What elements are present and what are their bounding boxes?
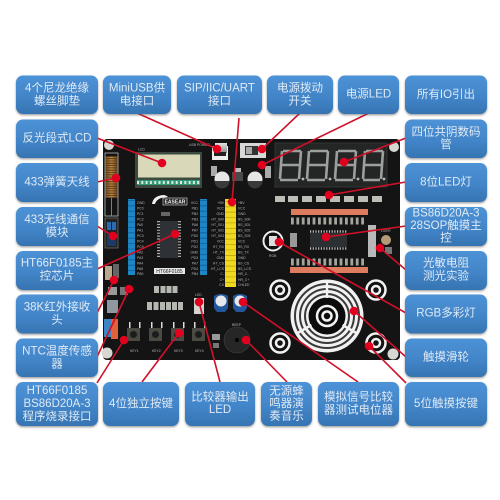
label: potentiometer: 器测试电位器 [324, 402, 393, 416]
circuit board [102, 139, 400, 360]
label: MiniUSB power [103, 76, 171, 114]
callout dots [109, 145, 384, 350]
four key switches [127, 322, 206, 353]
USB socket: USB POWER [189, 143, 210, 147]
pin labels: PB3 [192, 218, 198, 222]
label: nylon screw feet: 螺丝脚垫 [34, 94, 80, 108]
label: buzzer: 鸣器演 [269, 396, 304, 410]
vertical connector and photoresistor [368, 225, 392, 257]
label: photoresistor [405, 251, 487, 290]
pin labels: BS_TX [238, 250, 249, 254]
touch wheel [290, 280, 364, 352]
label: nylon screw feet [16, 76, 98, 114]
pin labels: VCC [217, 240, 225, 244]
label: programming interface: BS86D20A-3 [23, 398, 91, 410]
pin labels: VCC [191, 201, 199, 205]
pin labels: HT_CS [213, 262, 225, 266]
pin labels: VCC [238, 240, 246, 244]
pin labels: CX [219, 283, 225, 287]
label: power switch [267, 76, 333, 114]
pin labels: CHLED [238, 283, 250, 287]
pin labels: PD3 [191, 256, 198, 260]
blue pin header left [128, 199, 135, 275]
comparator LED [194, 293, 204, 314]
pin labels: PA0 [137, 223, 143, 227]
main MCU chip [158, 212, 180, 258]
pin labels: PA5 [137, 267, 143, 271]
label: touch wheel [405, 338, 487, 377]
label: all IO [405, 76, 487, 114]
pin labels: PD1 [191, 240, 198, 244]
pin labels: PC5 [137, 245, 144, 249]
small resistor rows [147, 286, 183, 310]
pin labels: BS_CS [238, 262, 250, 266]
label: buzzer: 奏音乐 [269, 408, 304, 422]
label: photoresistor: 测光实验 [423, 268, 469, 282]
label: HT66F0185 MCU: HT66F0185主 [21, 256, 93, 270]
label: comparator LED: LED [209, 404, 231, 416]
pin labels: VCC [238, 206, 246, 210]
pin labels: +BV [238, 201, 245, 205]
blue pin header right [200, 199, 207, 275]
pin labels: HT_S00 [212, 218, 224, 222]
label: power switch: 电源拨动 [277, 80, 323, 94]
pin labels: PA3 [137, 256, 143, 260]
label: LCD [16, 120, 98, 158]
touch buttons [270, 280, 386, 352]
pin labels: GND [216, 212, 225, 216]
label: four keys [103, 382, 179, 426]
label: HT66F0185 MCU: 控芯片 [40, 268, 74, 282]
pin labels: PB0 [137, 272, 144, 276]
pin labels: GND [137, 201, 145, 205]
label: buzzer [261, 382, 312, 426]
label: potentiometer [318, 382, 399, 426]
label: touch controller [405, 207, 487, 246]
label: 433 wireless: 433无线通信 [24, 212, 90, 226]
pin labels: PD4 [191, 267, 198, 271]
label: power LED [338, 76, 399, 114]
pin labels: PA1 [137, 228, 143, 232]
pin labels: PB4 [192, 272, 198, 276]
label: RGB LED [405, 294, 487, 334]
label: 433 wireless: 模块 [46, 226, 69, 239]
label: NTC [16, 338, 98, 377]
label: programming interface [16, 382, 98, 426]
label: comparator LED: 比较器输出 [191, 390, 249, 404]
label: 433 wireless [16, 207, 98, 246]
yellow pin header [225, 199, 236, 287]
pin labels: PC3 [137, 234, 144, 238]
pin labels [137, 201, 252, 287]
pin labels: GND [238, 256, 246, 260]
label: comparator LED [185, 382, 255, 426]
pin labels: BS_S02 [238, 228, 251, 232]
label: SIP IIC UART: 接口 [208, 94, 231, 108]
four key switches: KEY2 [152, 349, 161, 353]
label: touch wheel: 触摸滑轮 [423, 350, 469, 364]
label: MiniUSB power: MiniUSB供 [109, 80, 166, 94]
pin labels: C+ [220, 278, 224, 282]
label: photoresistor: 光敏电阻 [423, 256, 469, 270]
label: all IO: 所有IO引出 [417, 87, 475, 101]
pin labels: PA7 [192, 228, 198, 232]
pin labels: BS_S01 [238, 223, 251, 227]
programming connectors [104, 319, 118, 339]
label: eight LEDs [405, 163, 487, 202]
label: potentiometer: 模拟信号比较 [324, 390, 393, 404]
label: MiniUSB power: 电接口 [120, 94, 154, 108]
pin labels: BS_LCS [238, 267, 252, 271]
pin labels: PC0 [137, 206, 144, 210]
potentiometers [214, 294, 247, 312]
label: power LED: 电源LED [346, 86, 391, 100]
pin labels: VCC [217, 206, 225, 210]
capacitors and regulator [211, 166, 271, 189]
pin labels: PD0 [191, 234, 198, 238]
pin labels: HT_RX [213, 245, 225, 249]
pin labels: PC2 [137, 218, 144, 222]
pin labels: HT_TX [213, 250, 225, 254]
label: 38K infrared: 38K红外接收 [24, 300, 91, 314]
four key switches: KEY3 [174, 349, 183, 353]
label: seven segment [405, 120, 487, 158]
label: four keys: 4位独立按键 [109, 396, 173, 410]
label: 38K infrared: 头 [51, 314, 63, 326]
pin labels: BS_RX [238, 245, 250, 249]
label: touch controller: 28SOP触摸主 [410, 218, 482, 232]
lower salmon header and resistors [290, 262, 368, 273]
USB socket [189, 143, 228, 160]
buzzer: BEEP [232, 323, 242, 327]
leader lines [97, 113, 406, 383]
label: NTC: NTC温度传感 [22, 344, 92, 358]
label: programming interface: HT66F0185 [27, 385, 87, 397]
LCD display [135, 148, 202, 188]
label: NTC: 器 [51, 358, 63, 370]
pin labels: PA2 [137, 250, 143, 254]
pin labels: +BV [217, 201, 225, 205]
vertical connector and photoresistor: LIGHT [381, 229, 391, 233]
four key switches: KEY4 [195, 349, 204, 353]
pin labels: PA4 [137, 262, 143, 266]
pin labels: PC4 [137, 240, 144, 244]
mounting screws [102, 140, 399, 360]
RGB LED: RGB [269, 254, 277, 258]
label: five touch keys [405, 382, 487, 426]
pin labels: BS_S00 [238, 218, 251, 222]
buzzer [212, 323, 250, 353]
four digit seven segment display [275, 143, 387, 187]
pin labels: HT_S03 [212, 234, 224, 238]
pin labels: HR_C- [238, 272, 248, 276]
eight LEDs [275, 196, 382, 202]
label: SIP IIC UART [177, 76, 262, 114]
touch controller chip [290, 232, 347, 248]
label: programming interface: 程序烧录接口 [22, 409, 92, 423]
label: five touch keys: 5位触摸按键 [414, 396, 478, 410]
HT66F0185 label: HT66F0185 [156, 269, 183, 275]
pin labels: PD2 [191, 245, 198, 249]
EASEAR logo: EASEAR [165, 200, 186, 206]
label: seven segment: 四位共阴数码 [412, 124, 480, 138]
pin labels: PC1 [137, 212, 144, 216]
pin labels: GND [238, 212, 246, 216]
four key switches: KEY1 [130, 349, 139, 353]
EASEAR logo [152, 195, 187, 206]
power switch [240, 143, 266, 158]
pin labels: GND [216, 256, 225, 260]
RGB LED [264, 232, 282, 258]
pin labels: C- [220, 272, 224, 276]
label: LCD: 反光段式LCD [22, 130, 92, 144]
label: spring antenna: 433弹簧天线 [24, 174, 90, 188]
label: RGB LED: RGB多彩灯 [416, 306, 476, 320]
pin labels: HT_S02 [212, 228, 224, 232]
pin labels: GND [190, 250, 199, 254]
pin labels: HT_LCS [211, 267, 225, 271]
pin labels: PB2 [192, 212, 198, 216]
label: touch controller: BS86D20A-3 [412, 208, 480, 220]
label: HT66F0185 MCU [16, 251, 98, 290]
comparator LED: LED [195, 293, 202, 297]
label: 38K infrared [16, 294, 98, 334]
pin labels: PB1 [192, 206, 198, 210]
label: nylon screw feet: 4个尼龙绝缘 [25, 80, 89, 94]
upper salmon header and resistors [291, 209, 368, 221]
433 wireless module [105, 218, 118, 248]
IR receiver and left-side components [105, 264, 128, 313]
pin labels: BS_S03 [238, 234, 251, 238]
label: touch controller: 控 [440, 230, 452, 244]
pin labels: HR_C+ [238, 278, 249, 282]
label: eight LEDs: 8位LED灯 [420, 174, 472, 188]
label: spring antenna [16, 163, 98, 202]
label: power switch: 开关 [288, 94, 312, 108]
LCD display: LCD [138, 148, 145, 152]
label: SIP IIC UART: SIP/IIC/UART [184, 82, 255, 94]
pin labels: PA6 [192, 223, 198, 227]
pin labels: HT_S01 [212, 223, 224, 227]
pin labels: PA7 [192, 262, 198, 266]
spring antenna [105, 153, 118, 216]
label: seven segment: 管 [440, 137, 452, 151]
label: buzzer: 无源蜂 [269, 384, 304, 398]
